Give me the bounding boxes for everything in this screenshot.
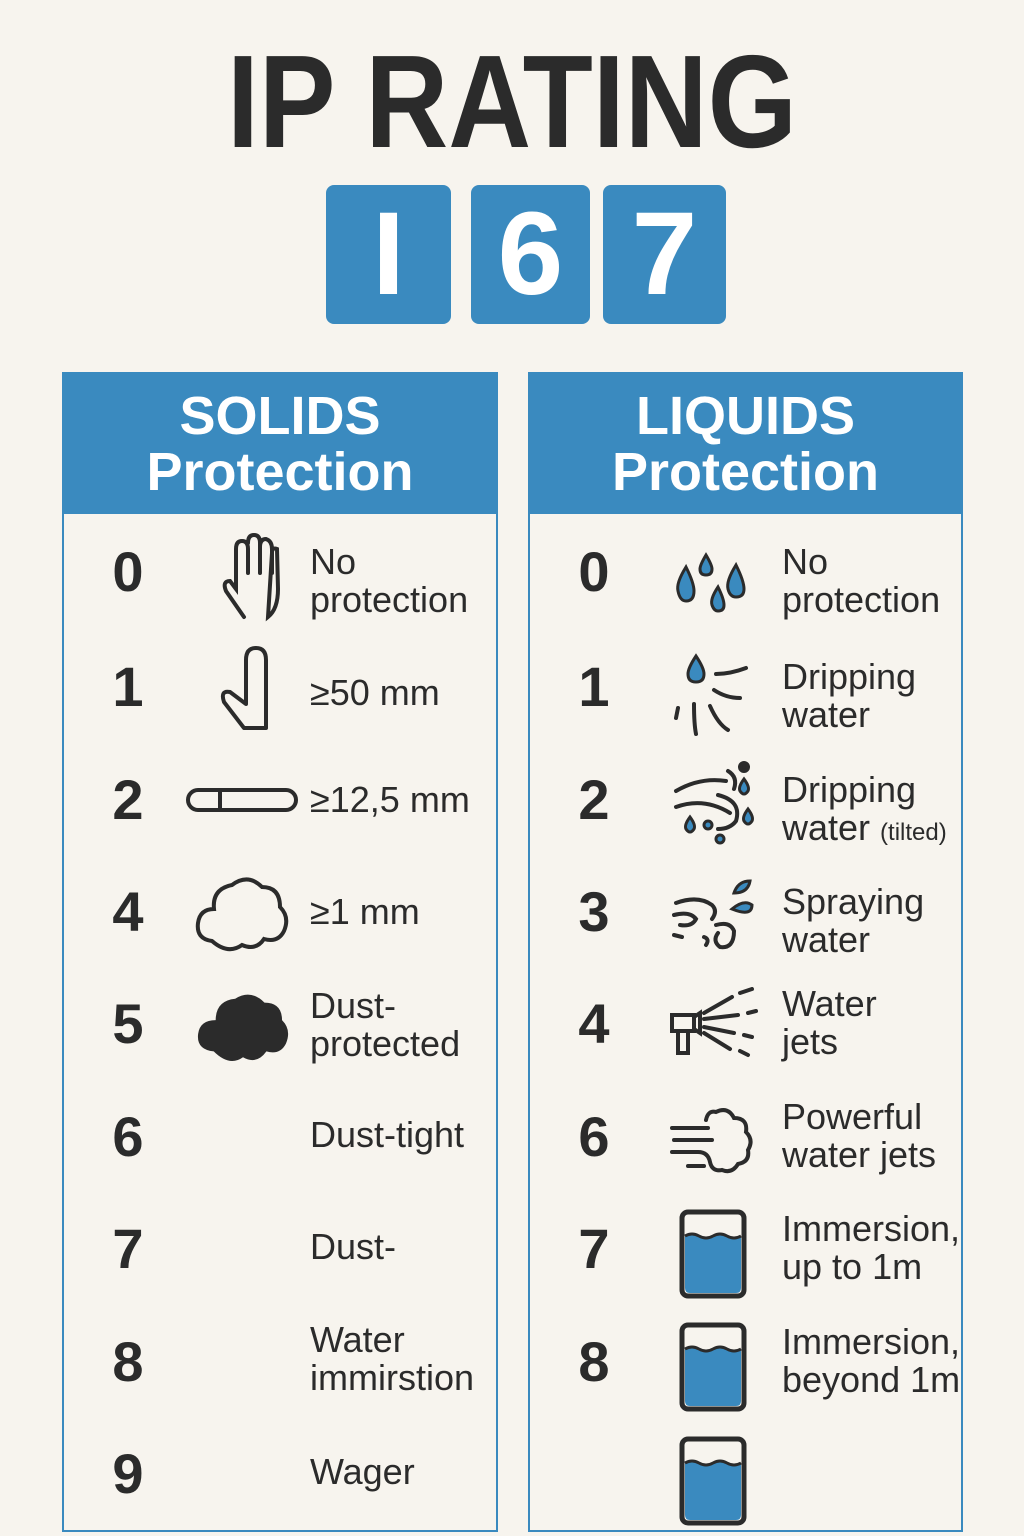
row 9: Wager — [310, 1451, 415, 1492]
box I: I — [372, 188, 405, 320]
icon: hand — [222, 533, 280, 622]
row 4: jets — [782, 1021, 838, 1062]
panel: liquids — [528, 372, 963, 1532]
icon: cloud filled — [198, 994, 288, 1061]
box 6 — [471, 185, 590, 324]
row 4: Water — [782, 983, 877, 1024]
row 1 — [112, 646, 440, 730]
heading: solids — [64, 374, 496, 514]
row 9 — [112, 1442, 415, 1505]
row 0 — [578, 540, 940, 620]
row 1 — [578, 653, 916, 736]
row 0: protection — [782, 579, 940, 620]
row 7: 7 — [112, 1217, 144, 1280]
row 6 — [578, 1096, 936, 1175]
row 1: ≥50 mm — [310, 672, 440, 713]
row 2: 2 — [578, 768, 610, 831]
row 6: 6 — [578, 1105, 610, 1168]
icon: cloud outline — [196, 877, 288, 952]
row 3: Spraying — [782, 881, 924, 922]
row 7: 7 — [578, 1217, 610, 1280]
row 8: beyond 1m — [782, 1359, 960, 1400]
row 5: protected — [310, 1023, 460, 1064]
icon: water jet nozzle — [670, 987, 758, 1058]
row 5 — [112, 985, 460, 1064]
row 0: No — [310, 541, 356, 582]
row 4 — [112, 877, 420, 952]
icon: tilted drips — [674, 761, 754, 844]
box 7: 7 — [632, 188, 697, 320]
row 7: Dust- — [310, 1226, 396, 1267]
row 6 — [112, 1105, 464, 1168]
row 2: 2 — [112, 768, 144, 831]
row 1: 1 — [112, 655, 144, 718]
icon: spraying — [672, 880, 754, 950]
row 2: water (tilted) — [782, 807, 947, 848]
title: IP RATING — [227, 28, 797, 175]
row 4 — [578, 983, 877, 1062]
heading: solids: SOLIDS — [179, 386, 381, 446]
row 7: Immersion, — [782, 1208, 960, 1249]
heading: liquids: LIQUIDS — [636, 386, 855, 446]
row 6: 6 — [112, 1105, 144, 1168]
heading: liquids — [530, 374, 961, 514]
panel: solids — [62, 372, 498, 1532]
row 5: 5 — [112, 992, 144, 1055]
row 7 — [112, 1217, 396, 1280]
row 4: ≥1 mm — [310, 891, 420, 932]
row 6: Powerful — [782, 1096, 922, 1137]
heading: liquids: Protection — [612, 442, 879, 502]
row 3: 3 — [578, 880, 610, 943]
icon: glass — [680, 1210, 746, 1298]
row 1: Dripping — [782, 656, 916, 697]
row 8: 8 — [112, 1330, 144, 1393]
row 3: water — [782, 919, 870, 960]
row 0 — [112, 533, 468, 622]
row 8: immirstion — [310, 1357, 474, 1398]
box 7 — [603, 185, 726, 324]
icon: drops — [676, 552, 746, 612]
row 8 — [578, 1321, 960, 1412]
icon: glass — [680, 1322, 746, 1412]
row 2 — [112, 768, 470, 831]
row 0: protection — [310, 579, 468, 620]
row 0: No — [782, 541, 828, 582]
row 8: Water — [310, 1319, 405, 1360]
box I — [326, 185, 451, 324]
box 6: 6 — [498, 188, 563, 320]
row 9: 9 — [112, 1442, 144, 1505]
row 1: water — [782, 694, 870, 735]
row 5: Dust- — [310, 985, 396, 1026]
row 6: Dust-tight — [310, 1114, 464, 1155]
row 9 — [680, 1436, 746, 1526]
row 2 — [578, 761, 947, 848]
row 4: 4 — [578, 992, 610, 1055]
heading: solids: Protection — [146, 442, 414, 502]
row 3 — [578, 880, 924, 960]
icon: finger — [220, 646, 268, 730]
icon: dripping — [674, 653, 748, 736]
row 8 — [112, 1319, 474, 1398]
row 7: up to 1m — [782, 1246, 922, 1287]
icon: rod — [186, 788, 298, 812]
icon: glass — [680, 1436, 746, 1526]
row 6: water jets — [782, 1134, 936, 1175]
row 0: 0 — [112, 540, 144, 603]
row 1: 1 — [578, 655, 610, 718]
row 7 — [578, 1208, 960, 1298]
row 2: Dripping — [782, 769, 916, 810]
icon: powerful jets — [670, 1108, 753, 1174]
row 2: ≥12,5 mm — [310, 779, 470, 820]
row 0: 0 — [578, 540, 610, 603]
row 8: 8 — [578, 1330, 610, 1393]
row 4: 4 — [112, 880, 144, 943]
row 8: Immersion, — [782, 1321, 960, 1362]
code boxes — [326, 185, 726, 324]
